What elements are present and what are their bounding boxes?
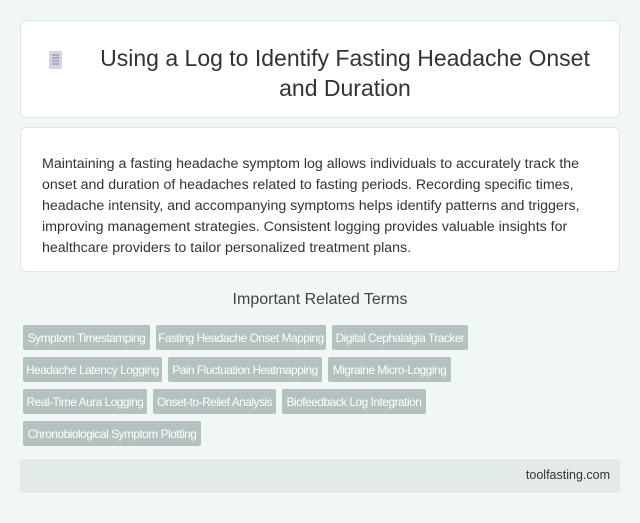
tags: Onset-to-Relief Analysis bbox=[157, 395, 272, 409]
footer source text: toolfasting.com bbox=[526, 468, 610, 482]
title: Using a Log to Identify Fasting Headache Onset and Duration bbox=[100, 45, 590, 101]
description card bbox=[20, 127, 620, 272]
footer bbox=[20, 459, 620, 493]
related terms heading: Important Related Terms bbox=[233, 291, 407, 308]
tags: Real-Time Aura Logging bbox=[27, 395, 143, 409]
tags: Chronobiological Symptom Plotting bbox=[28, 427, 196, 441]
tags: Pain Fluctuation Heatmapping bbox=[172, 363, 318, 377]
tags: Digital Cephalalgia Tracker bbox=[336, 331, 464, 345]
tags: Headache Latency Logging bbox=[26, 363, 159, 377]
tags: Symptom Timestamping bbox=[28, 331, 145, 345]
tags: Biofeedback Log Integration bbox=[287, 395, 421, 409]
description text: Maintaining a fasting headache symptom log allows individuals to accurately track the onset and duration of headaches related to fasting periods. Recording specific times, headache intensity, and accompanying symptoms helps identify patterns and triggers, improving management strategies. Consistent logging provides valuable insights for healthcare providers to tailor personalized treatment plans. bbox=[42, 156, 580, 256]
header card bbox=[20, 20, 620, 118]
tags: Migraine Micro-Logging bbox=[333, 363, 446, 377]
tags: Fasting Headache Onset Mapping bbox=[158, 331, 324, 345]
icon: log document bbox=[49, 51, 62, 69]
